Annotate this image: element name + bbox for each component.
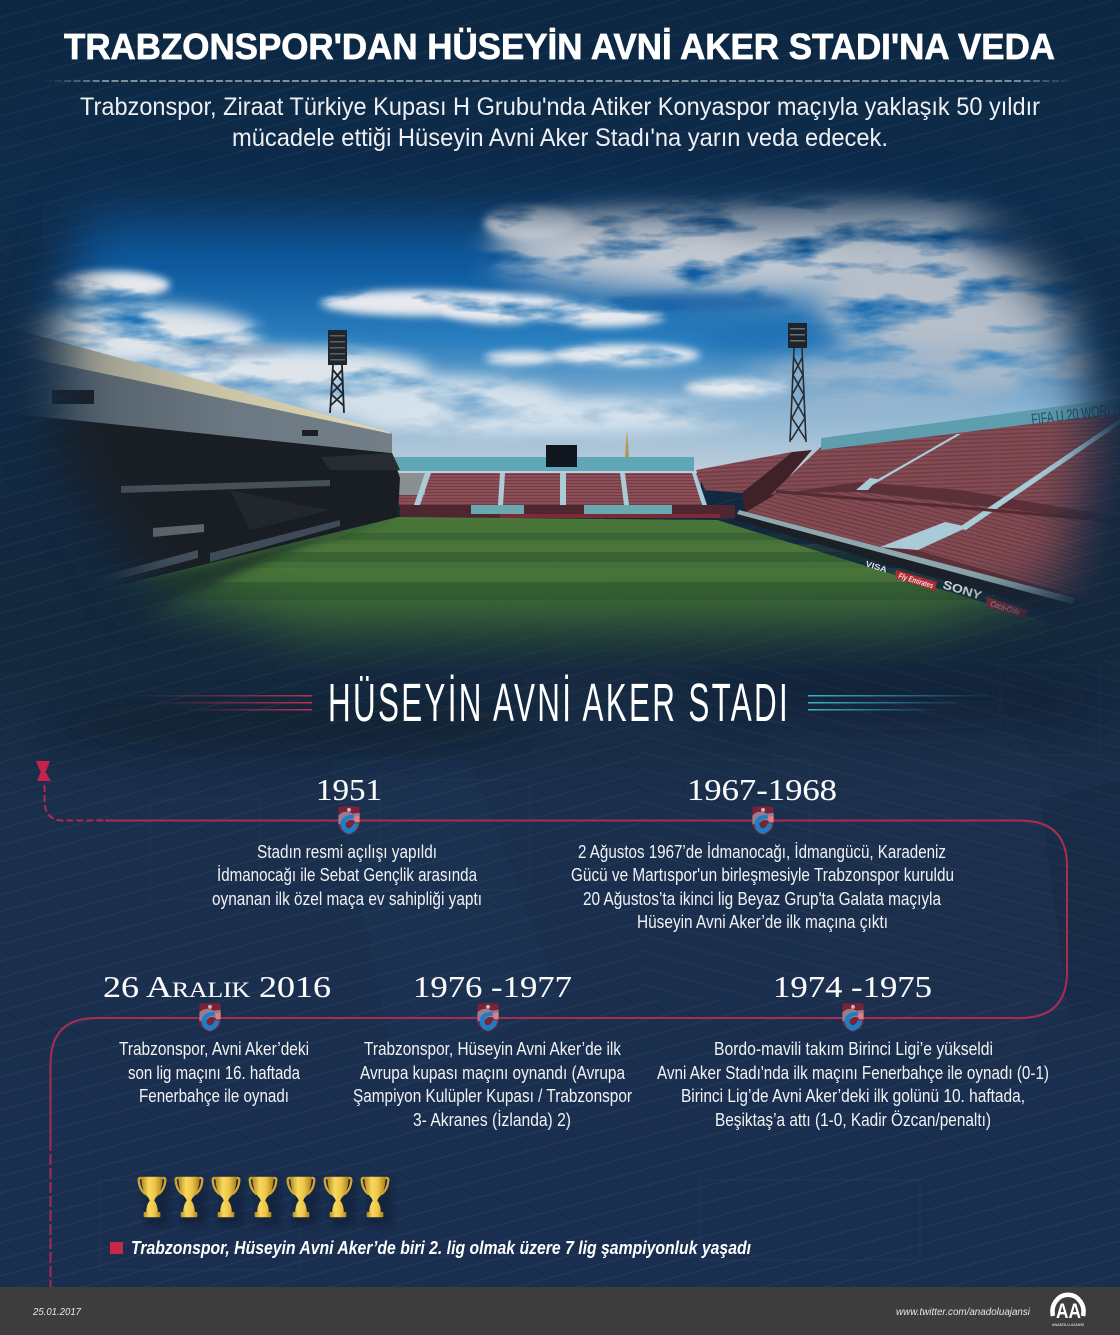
icon: club crest (338, 806, 360, 835)
description: Stadın resmi açılışı yapıldı (257, 841, 437, 862)
year: 1951 (316, 772, 382, 807)
date: 25.01.2017 (32, 1306, 82, 1318)
pitch-side advertising boards (735, 510, 1075, 620)
pitch (126, 517, 1036, 660)
description: 20 Ağustos’ta ikinci lig Beyaz Grup'ta Galata maçıyla (583, 888, 942, 909)
timeline entry 1974-1975 (657, 969, 1049, 1130)
year: 1967-1968 (687, 772, 837, 807)
description: 2 Ağustos 1967’de İdmanocağı, İdmangücü, Karadeniz (578, 841, 946, 862)
far stand banner (386, 457, 694, 471)
pitch-side advertising boards: SONY (941, 577, 983, 603)
description: Birinci Lig’de Avni Aker’deki ilk golünü 10. haftada, (681, 1085, 1025, 1106)
main title: TRABZONSPOR'DAN HÜSEYİN AVNİ AKER STADI'NA VEDA (64, 26, 1055, 67)
logo: Anadolu Ajansi: AA (1056, 1300, 1081, 1323)
description: Fenerbahçe ile oynadı (139, 1085, 289, 1106)
sky accents (170, 221, 1050, 354)
footer bar (0, 1287, 1120, 1335)
trophies (139, 1177, 392, 1226)
description: oynanan ilk özel maça ev sahipliği yaptı (212, 888, 482, 909)
stand roof (0, 325, 392, 434)
description: Bordo-mavili takım Birinci Ligi’e yükseldi (714, 1038, 993, 1059)
icon: club crest (842, 1003, 864, 1032)
pitch-side advertising boards: VISA (864, 559, 888, 574)
description: İdmanocağı ile Sebat Gençlik arasında (217, 864, 478, 885)
description: Gücü ve Martıspor'un birleşmesiyle Trabzonspor kuruldu (571, 864, 954, 885)
logo: Anadolu Ajansi (1052, 1295, 1084, 1327)
intro text (80, 93, 1040, 152)
social link: www.twitter.com/anadoluajansi (896, 1306, 1031, 1318)
description (212, 841, 482, 909)
year: 26 Aralık 2016 (103, 969, 331, 1004)
timeline entry 1976-1977 (353, 969, 632, 1130)
description: Hüseyin Avni Aker’de ilk maçına çıktı (637, 911, 888, 932)
stadium photo (21, 186, 1120, 660)
pitch-side advertising boards: Coca-Cola (989, 599, 1021, 617)
description (657, 1038, 1049, 1130)
championship note (110, 1238, 751, 1258)
description: Trabzonspor, Avni Aker’deki (119, 1038, 309, 1059)
bullet (110, 1242, 123, 1254)
description: Beşiktaş’a attı (1-0, Kadir Özcan/penaltı) (715, 1109, 991, 1130)
note text: Trabzonspor, Hüseyin Avni Aker’de biri 2. lig olmak üzere 7 lig şampiyonluk yaşadı (131, 1238, 751, 1258)
logo: Anadolu Ajansi: ANADOLU AJANSI (1052, 1322, 1084, 1327)
covered stand left (0, 412, 400, 612)
description: 3- Akranes (İzlanda) 2) (413, 1109, 571, 1130)
left floodlight tower (328, 330, 347, 413)
description: Trabzonspor, Hüseyin Avni Aker’de ilk (364, 1038, 622, 1059)
timeline entry 26 Aralik 2016 (103, 969, 331, 1106)
description (353, 1038, 632, 1130)
pitch-side advertising boards: Fly Emirates (897, 571, 935, 591)
intro text: mücadele ettiği Hüseyin Avni Aker Stadı'na yarın veda edecek. (232, 124, 888, 152)
scoreboard (546, 445, 577, 467)
far stand seats (395, 473, 735, 518)
stand shadow on pitch (127, 520, 384, 606)
intro text: Trabzonspor, Ziraat Türkiye Kupası H Grubu'nda Atiker Konyaspor maçıyla yaklaşık 50 yıldır (80, 93, 1040, 121)
icon: club crest (477, 1003, 499, 1032)
year: 1974 -1975 (773, 969, 932, 1004)
clouds (0, 197, 1105, 434)
description: son lig maçını 16. haftada (128, 1062, 301, 1083)
stand wall (0, 352, 392, 453)
icon: club crest (199, 1003, 221, 1032)
year: 1976 -1977 (413, 969, 572, 1004)
icon: club crest (752, 806, 774, 835)
description: Avrupa kupası maçını oynandı (Avrupa (360, 1062, 626, 1083)
description: Avni Aker Stadı'nda ilk maçını Fenerbahçe ile oynadı (0-1) (657, 1062, 1049, 1083)
right stand (742, 398, 1120, 612)
title divider (45, 80, 1075, 82)
heading lines: red (128, 695, 312, 710)
minaret (625, 430, 629, 457)
sky (30, 189, 1120, 480)
section heading: HÜSEYİN AVNİ AKER STADI (328, 673, 790, 733)
timeline entry 1967-1968 (571, 772, 954, 932)
description (119, 1038, 309, 1106)
right stand curved section (696, 452, 792, 493)
description: Şampiyon Kulüpler Kupası / Trabzonspor (353, 1085, 632, 1106)
heading lines: blue (808, 695, 998, 710)
wall windows (52, 390, 318, 436)
timeline path (44, 785, 1067, 1287)
description (571, 841, 954, 932)
icon: hourglass (36, 761, 51, 781)
right floodlight tower (788, 323, 807, 442)
timeline entry 1951 (212, 772, 482, 909)
